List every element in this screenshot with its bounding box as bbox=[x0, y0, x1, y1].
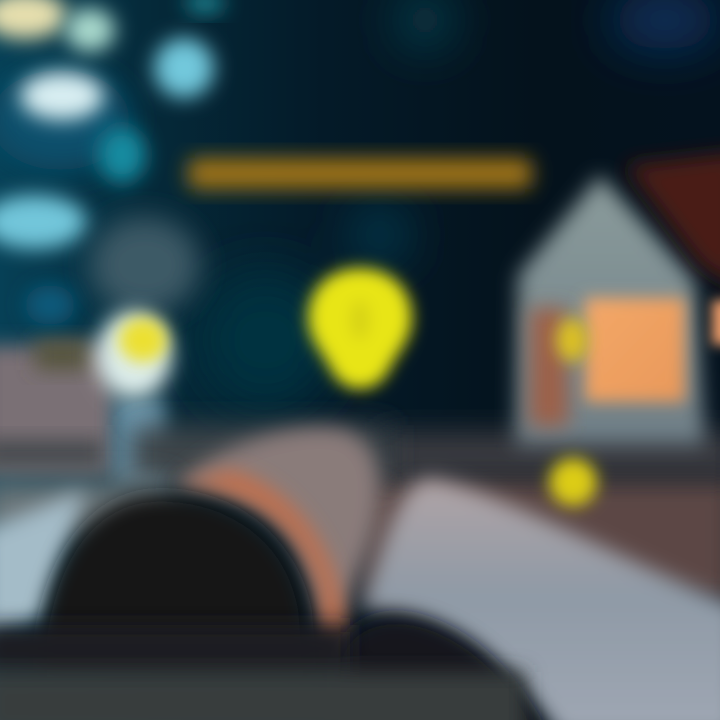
table: dark foreground edge bbox=[0, 625, 525, 720]
icon: yellow dot on house bbox=[556, 318, 588, 362]
street lamp: glowing light bbox=[96, 311, 172, 399]
icon: yellow dot below house bbox=[549, 458, 597, 506]
buildings: blurred left block bbox=[0, 340, 165, 485]
city lights: bokeh on the left bbox=[0, 0, 225, 325]
book: open book in foreground bbox=[0, 428, 720, 720]
icon: yellow light bulb badge bbox=[308, 268, 412, 389]
title: unreadable amber heading bbox=[188, 158, 532, 189]
house: grey building with roof, window and door bbox=[515, 152, 720, 445]
glow: teal centre haze bbox=[195, 0, 720, 410]
floor: ground plane bbox=[0, 425, 720, 605]
